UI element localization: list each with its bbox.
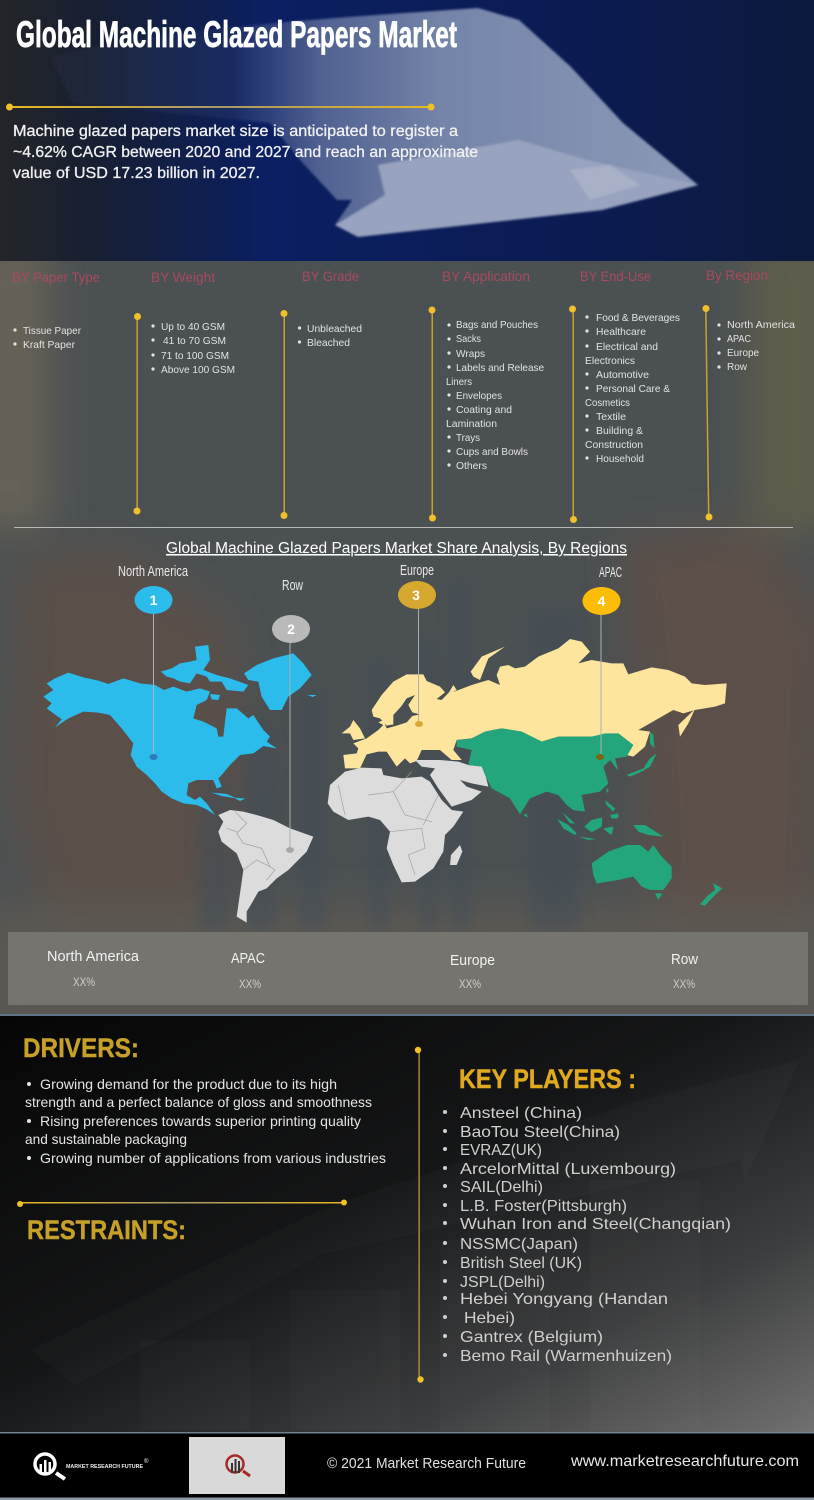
list: key players: BaoTou Steel(China) [460,1124,620,1141]
list: applications: Labels and Release [456,362,544,374]
pin: north america: 1 [150,592,158,608]
list: end uses [585,312,680,465]
list: key players: Hebei) [464,1310,515,1327]
map: europe and russia [342,639,727,768]
list: regions: North America [727,319,795,331]
pin: apac: APAC [599,564,622,581]
connector: end-use [569,306,577,523]
list: key players: Gantrex (Belgium) [460,1329,603,1346]
text: drivers list: Growing number of applications from various industries [40,1150,386,1166]
list: regions [717,319,795,373]
pin: north america [118,563,188,760]
connector: region [702,305,712,520]
list: key players: Wuhan Iron and Steel(Changqian) [460,1216,731,1233]
list: applications: Lamination [446,418,497,430]
list: key players: NSSMC(Japan) [460,1236,578,1253]
stat: europe [450,952,495,991]
map: south america [218,810,313,923]
text: drivers list: strength and a perfect balance of gloss and smoothness [25,1094,372,1110]
list: regions: Row [727,361,747,373]
panel: footer [0,1432,814,1500]
list: end uses: Personal Care & [596,383,670,395]
list: key players: SAIL(Delhi) [460,1179,543,1196]
text: drivers list: and sustainable packaging [25,1131,187,1147]
connector: key players [415,1047,424,1383]
list: paper types [13,325,81,351]
list: end uses: Cosmetics [585,397,630,409]
list: regions: APAC [727,333,751,345]
stat: north america: North America [47,948,140,965]
text: copyright: © 2021 Market Research Future [327,1455,526,1472]
pin: apac: 4 [598,593,606,609]
stat: apac [231,950,265,991]
heading: drivers: DRIVERS: [23,1033,139,1063]
list: end uses: Textile [596,411,626,423]
list: paper types: Tissue Paper [23,325,81,337]
text: drivers list: Rising preferences towards superior printing quality [40,1113,361,1129]
list: applications [446,319,544,472]
list: weights: Above 100 GSM [161,364,235,376]
list: key players: ArcelorMittal (Luxembourg) [460,1161,676,1178]
list: weights [151,321,235,376]
list: applications: Wraps [456,348,485,360]
title: Global Machine Glazed Papers Market [16,14,457,55]
list: key players [443,1105,731,1365]
connector: application [428,306,436,522]
divider: drivers connector [17,1200,347,1207]
stat: north america: XX% [73,975,95,989]
list: end uses: Household [596,453,644,465]
map: africa and middle east [328,760,488,882]
list: applications: Cups and Bowls [456,446,528,458]
pin: row: Row [282,577,303,594]
list: weights: Up to 40 GSM [161,321,225,333]
logo: market research future [35,1454,149,1479]
list: applications: Liners [446,376,472,388]
pin: europe: 3 [412,587,420,603]
connector: grade [280,310,288,519]
text: website: www.marketresearchfuture.com [570,1453,799,1470]
list: weights: 41 to 70 GSM [163,335,226,347]
pin: row: 2 [287,621,295,637]
logo: boxed icon [189,1437,285,1494]
heading: by region: By Region [706,267,768,283]
list: applications: Trays [456,432,480,444]
heading: restraints: RESTRAINTS: [27,1215,186,1245]
stat: apac: XX% [239,977,261,991]
list: weights: 71 to 100 GSM [161,350,229,362]
panel: segmentation columns [12,267,795,523]
list: key players: L.B. Foster(Pittsburgh) [460,1198,627,1215]
stat: north america [47,948,140,989]
stat: europe: Europe [450,952,495,969]
list: applications: Others [456,460,487,472]
list: end uses: Automotive [596,369,649,381]
pin: europe [398,562,436,727]
heading: by end-use: BY End-Use [580,268,651,284]
map: north america [43,645,317,815]
list: key players: JSPL(Delhi) [460,1274,545,1291]
pin: apac [582,564,622,760]
panel: regional share table [8,932,808,1005]
connector: weight [134,313,141,514]
list: key players: Bemo Rail (Warmenhuizen) [460,1348,672,1365]
text: drivers list: Growing demand for the product due to its high [40,1076,337,1092]
list: key players: Ansteel (China) [460,1105,582,1122]
logo: market research future: ® [144,1458,149,1465]
heading: by weight: BY Weight [151,269,215,285]
list: regions: Europe [727,347,759,359]
list: key players: EVRAZ(UK) [460,1142,542,1159]
heading: by application: BY Application [442,268,530,284]
stat: row: Row [671,951,698,968]
list: grades: Unbleached [307,323,362,335]
text: market summary: Machine glazed papers market size is anticipated to register a [13,123,458,140]
list: applications: Envelopes [456,390,502,402]
text: market summary [13,123,478,182]
image: paper roll [50,8,698,237]
list: applications: Coating and [456,404,512,416]
panel: segmentation and map background [0,240,814,1035]
stat: row: XX% [673,977,695,991]
heading: by grade: BY Grade [302,268,359,284]
heading: key players: KEY PLAYERS : [459,1064,636,1094]
list: paper types: Kraft Paper [23,339,75,351]
pin: row [272,577,310,853]
list: end uses: Food & Beverages [596,312,680,324]
heading: by paper type: BY Paper Type [12,269,100,285]
stat: europe: XX% [459,977,481,991]
text: market summary: value of USD 17.23 billion in 2027. [13,165,260,182]
list: end uses: Healthcare [596,326,646,338]
list: grades [298,323,362,349]
list: key players: British Steel (UK) [460,1255,582,1272]
text: drivers list [25,1076,386,1166]
panel: drivers, restraints and key players [0,1016,814,1432]
map: apac [457,728,722,906]
list: key players: Hebei Yongyang (Handan [460,1291,668,1308]
world map [43,639,727,923]
divider: header connector [6,104,434,110]
list: end uses: Electrical and [596,341,658,353]
panel: header [0,0,814,261]
stat: row [671,951,698,991]
list: end uses: Building & [596,425,643,437]
text: market summary: ~4.62% CAGR between 2020 and 2027 and reach an approximate [13,144,478,161]
pin: north america: North America [118,563,188,580]
heading: map title: Global Machine Glazed Papers Market Share Analysis, By Regions [166,540,627,557]
pin: europe: Europe [400,562,434,579]
list: grades: Bleached [307,337,350,349]
list: end uses: Construction [585,439,643,451]
logo: market research future: MARKET RESEARCH FUTURE [66,1464,144,1470]
stat: apac: APAC [231,950,265,967]
list: applications: Sacks [456,333,481,345]
list: applications: Bags and Pouches [456,319,538,331]
list: end uses: Electronics [585,355,635,367]
